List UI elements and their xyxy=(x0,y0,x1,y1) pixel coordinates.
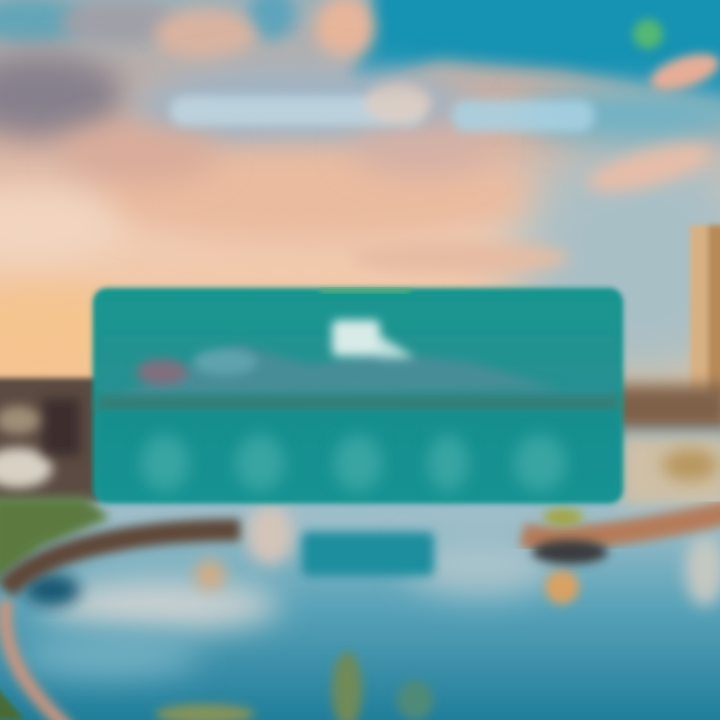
statistic column 2 xyxy=(236,435,284,491)
statistic column 1 xyxy=(141,435,189,491)
sky background xyxy=(0,0,720,420)
water xyxy=(0,505,720,720)
blurred heading figure xyxy=(332,320,415,358)
pier right xyxy=(522,508,720,564)
panel: main teal card xyxy=(93,288,623,503)
panel: upper header section xyxy=(97,288,619,398)
statistic column 5 xyxy=(514,435,566,491)
reflection of panel xyxy=(302,532,434,576)
palm fronds foreground xyxy=(155,652,433,720)
shoreline left xyxy=(0,378,100,503)
tower building xyxy=(690,225,720,395)
divider band xyxy=(97,396,619,410)
grass bank left xyxy=(0,497,240,720)
statistic column 3 xyxy=(334,435,382,491)
panel: lower statistic columns xyxy=(97,412,619,500)
blurred red label xyxy=(136,359,188,385)
statistic column 4 xyxy=(428,435,468,491)
blurred subtitle xyxy=(193,349,257,375)
blurred title xyxy=(170,83,594,132)
shoreline right xyxy=(610,385,720,516)
icon: green logo mark xyxy=(633,19,663,49)
